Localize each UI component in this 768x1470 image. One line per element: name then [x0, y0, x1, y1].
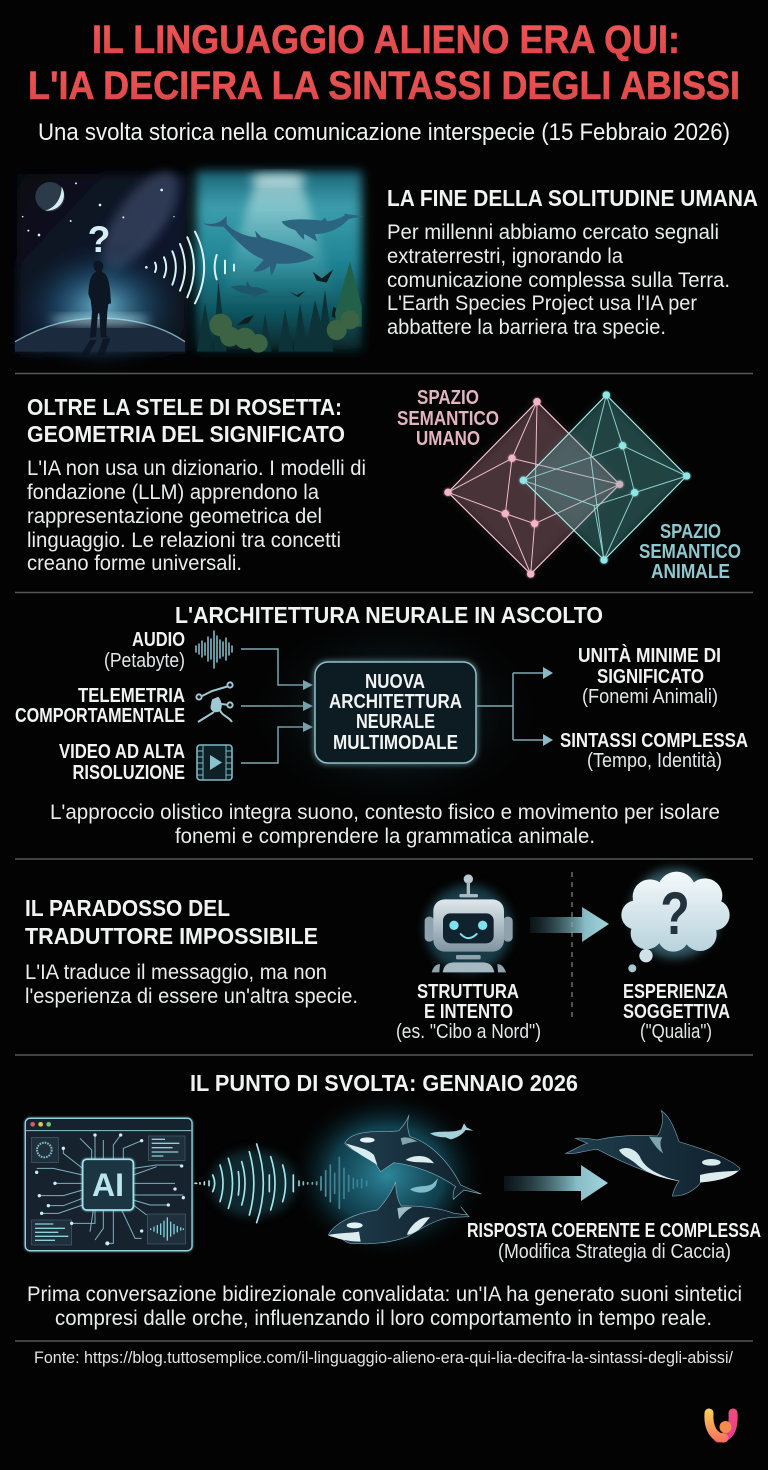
caption [27, 1282, 742, 1330]
label: subjective experience: SOGGETTIVA [623, 1001, 730, 1023]
panel: paradosso del traduttore [25, 868, 730, 1043]
core box: neural architecture: MULTIMODALE [333, 732, 458, 754]
panel: architettura neurale [15, 602, 748, 848]
sound wave signal [195, 1144, 367, 1223]
connector arrows: core to outputs [476, 667, 553, 746]
output labels: SIGNIFICATO [597, 666, 704, 688]
label: animal semantic space: SEMANTICO [639, 541, 741, 563]
title: IL LINGUAGGIO ALIENO ERA QUI: [92, 18, 680, 62]
illustration: AI interface window: AI [92, 1167, 124, 1203]
heading: OLTRE LA STELE DI ROSETTA: [27, 394, 342, 420]
body text: abbattere la barriera tra specie. [387, 315, 666, 339]
teal polyhedron [520, 391, 690, 564]
input labels: VIDEO AD ALTA [59, 741, 185, 763]
top orca [345, 1115, 481, 1199]
milky way [88, 160, 192, 280]
icon: thought cloud with question mark [621, 868, 730, 972]
mini panels [32, 1136, 186, 1245]
panel: la fine della solitudine umana [12, 160, 758, 373]
core box: neural architecture: NUOVA [365, 671, 425, 693]
label: human semantic space: SEMANTICO [397, 408, 499, 430]
label: coherent response [467, 1220, 761, 1263]
icon: behavioural telemetry [196, 682, 233, 722]
sound waves [145, 232, 234, 303]
diagram: overlapping semantic spaces [444, 391, 690, 578]
label: coherent response: (Modifica Strategia di Caccia) [498, 1241, 731, 1263]
label: human semantic space [397, 387, 499, 450]
connector arrows: inputs to core [241, 649, 313, 763]
input labels: AUDIO [132, 629, 185, 651]
forest [197, 280, 333, 352]
core box: neural architecture: ARCHITETTURA [329, 691, 462, 713]
arrow [504, 1165, 608, 1201]
input labels: TELEMETRIA [78, 685, 185, 707]
caption [50, 800, 720, 848]
label: subjective experience: ESPERIENZA [623, 981, 728, 1003]
bottom orca [328, 1182, 469, 1244]
body text: rappresentazione geometrica del [27, 504, 322, 528]
label: human semantic space: SPAZIO [417, 387, 479, 409]
body text [27, 456, 366, 575]
heading: IL PUNTO DI SVOLTA: GENNAIO 2026 [190, 1070, 578, 1096]
icon: robot [425, 874, 513, 972]
title [28, 18, 740, 108]
body text: extraterrestri, ignorando la [387, 244, 623, 268]
body text: linguaggio. Le relazioni tra concetti [27, 528, 341, 552]
output labels [560, 644, 748, 772]
icon: thought cloud with question mark: ? [660, 880, 690, 947]
label: human semantic space: UMANO [416, 428, 480, 450]
stars [22, 182, 175, 236]
heading [25, 895, 318, 949]
heading: IL PARADOSSO DEL [25, 895, 230, 921]
label: structure and intent [396, 981, 541, 1043]
label: animal semantic space: SPAZIO [660, 521, 721, 543]
panel: il punto di svolta [25, 1070, 761, 1330]
output labels: (Fonemi Animali) [582, 686, 718, 708]
light rays and surface [220, 177, 337, 300]
panel: oltre la stele di rosetta [27, 387, 741, 583]
moon [35, 182, 65, 211]
label: animal semantic space [639, 521, 741, 583]
label: structure and intent: (es. "Cibo a Nord") [396, 1021, 541, 1043]
arrow [530, 907, 609, 942]
output labels: (Tempo, Identità) [587, 750, 722, 772]
caption: L'approccio olistico integra suono, contesto fisico e movimento per isolare [50, 800, 720, 824]
input labels: RISOLUZIONE [72, 762, 185, 784]
body text: creano forme universali. [27, 551, 242, 575]
pink polyhedron [444, 398, 623, 578]
icon: audio waveform [196, 631, 232, 668]
source footnote: Fonte: https://blog.tuttosemplice.com/il-linguaggio-alieno-era-qui-lia-decifra-la-sintassi-degli-abissi/ [34, 1348, 733, 1367]
person [88, 261, 111, 338]
body text: fondazione (LLM) apprendono la [27, 480, 319, 504]
logo [709, 1413, 733, 1438]
heading: GEOMETRIA DEL SIGNIFICATO [27, 421, 345, 447]
illustration: orca pod [292, 1093, 482, 1257]
label: subjective experience [623, 981, 730, 1043]
input labels: (Petabyte) [104, 650, 185, 672]
input labels [15, 629, 185, 784]
small whales [430, 1123, 473, 1139]
label: structure and intent: STRUTTURA [417, 981, 519, 1003]
body text [25, 960, 358, 1008]
illustration: responding orca [566, 1111, 740, 1196]
body text: l'esperienza di essere un'altra specie. [25, 984, 358, 1008]
output labels: UNITÀ MINIME DI [578, 644, 721, 667]
chip [83, 1159, 133, 1210]
heading [27, 394, 345, 447]
whales [203, 216, 314, 276]
caption: compresi dalle orche, influenzando il loro comportamento in tempo reale. [55, 1306, 712, 1330]
icon: video film strip [197, 745, 232, 780]
heading: L'ARCHITETTURA NEURALE IN ASCOLTO [175, 602, 603, 628]
circuit traces [37, 1135, 183, 1243]
core box: neural architecture: NEURALE [356, 711, 435, 733]
input labels: COMPORTAMENTALE [15, 705, 185, 727]
birds [236, 269, 343, 326]
body text: Per millenni abbiamo cercato segnali [387, 220, 719, 244]
body text: L'Earth Species Project usa l'IA per [387, 291, 697, 315]
caption: Prima conversazione bidirezionale convalidata: un'IA ha generato suoni sintetici [27, 1282, 742, 1306]
label: animal semantic space: ANIMALE [651, 561, 730, 583]
body text: comunicazione complessa sulla Terra. [387, 268, 730, 292]
heading: TRADUTTORE IMPOSSIBILE [25, 923, 318, 949]
body text: L'IA non usa un dizionario. I modelli di [27, 456, 366, 480]
illustration: AI interface window [25, 1118, 192, 1251]
illustration: human under the stars and whales undersea [12, 160, 363, 373]
question mark: ? [88, 218, 110, 260]
label: subjective experience: ("Qualia") [640, 1021, 712, 1043]
body text: L'IA traduce il messaggio, ma non [25, 960, 327, 984]
core box: neural architecture [255, 617, 535, 807]
body text [387, 220, 730, 339]
label: structure and intent: E INTENTO [424, 1001, 513, 1023]
caption: fonemi e comprendere la grammatica animale. [175, 824, 595, 848]
